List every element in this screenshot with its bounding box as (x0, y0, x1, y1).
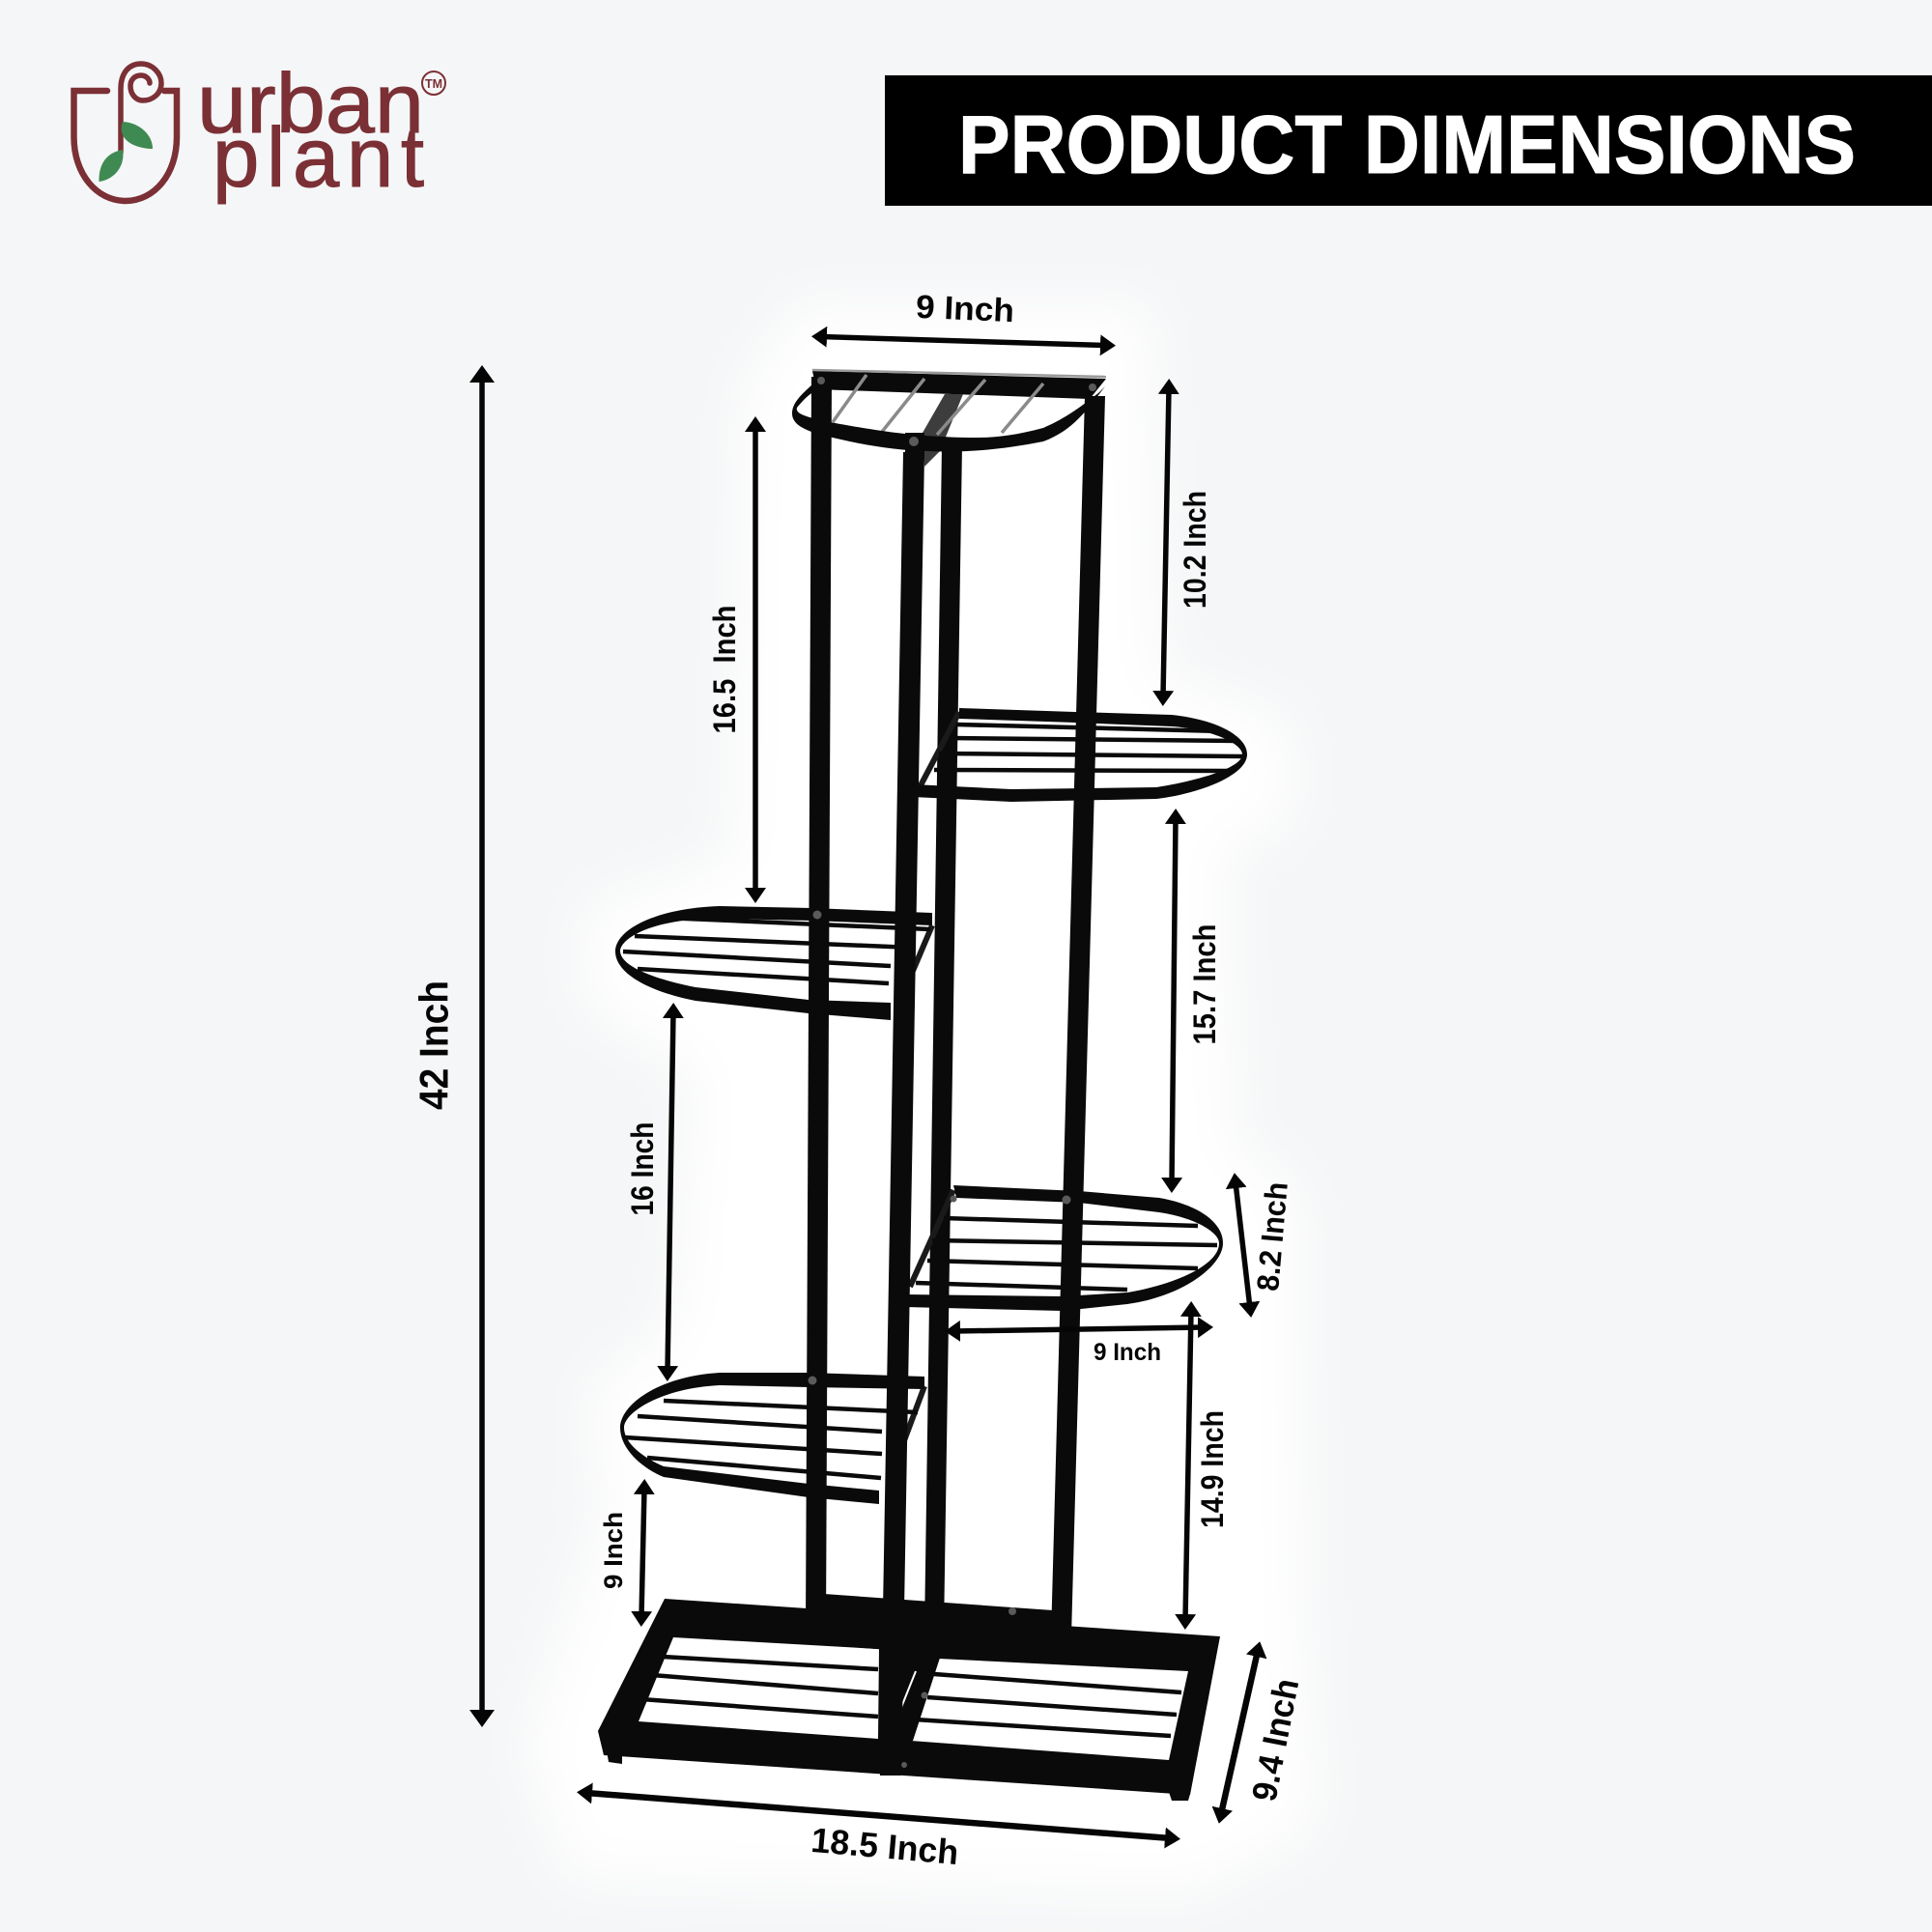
dimension: 9 Inch shelf width (954, 1327, 1204, 1366)
dimension: 9 Inch ground clearance (599, 1489, 644, 1617)
front pole (880, 452, 924, 1776)
dimension: top width 9 Inch (821, 289, 1106, 346)
dimension: base depth 9.4 Inch: 9.4 Inch (1244, 1675, 1306, 1804)
base frame (598, 1594, 1220, 1801)
base right opening (911, 1659, 1188, 1760)
dimension: 9 Inch ground clearance: 9 Inch (599, 1512, 628, 1589)
title banner: product dimensions (885, 75, 1932, 206)
trademark symbol: TM (425, 77, 442, 91)
dimension: 10.2 Inch: 10.2 Inch (1178, 491, 1212, 609)
dimension: 9 Inch shelf width: 9 Inch (1094, 1339, 1161, 1366)
stand poles (806, 377, 1105, 1637)
dimension: 16 Inch (625, 1012, 673, 1372)
dimension: 16 Inch: 16 Inch (625, 1122, 660, 1215)
base rods (641, 1632, 1188, 1736)
wordmark: plant: plant (213, 111, 424, 205)
dimension: 15.7 Inch: 15.7 Inch (1187, 923, 1222, 1045)
plant stand product (598, 370, 1247, 1801)
dimension: base width 18.5 Inch: 18.5 Inch (810, 1820, 960, 1872)
trademark symbol (422, 71, 445, 95)
shelf: upper left (615, 906, 932, 1020)
logo: Urban Plant (73, 57, 445, 205)
dimension: 16.5 Inch: 16.5 Inch (707, 605, 742, 734)
wordmark: urban: urban (197, 57, 424, 151)
dimension: 14.9 Inch: 14.9 Inch (1195, 1410, 1230, 1528)
title banner: product dimensions: PRODUCT DIMENSIONS (958, 99, 1856, 191)
dimension: top width 9 Inch: 9 Inch (915, 289, 1015, 329)
dimension: base width 18.5 Inch (586, 1793, 1171, 1872)
dimension: 15.7 Inch (1172, 818, 1222, 1183)
shelf: upper right (913, 708, 1247, 802)
icon: pot with sprout (73, 64, 177, 201)
base left opening (639, 1637, 879, 1739)
dimension: 14.9 Inch (1185, 1311, 1230, 1620)
dimension: base depth 9.4 Inch (1221, 1651, 1306, 1814)
base centre bracket (898, 1642, 942, 1741)
dimension: total height 42 Inch: 42 Inch (412, 980, 456, 1110)
shelf: lower right (905, 1185, 1223, 1311)
shelf: lower left (620, 1373, 924, 1504)
dimension: 8.2 Inch shelf depth (1236, 1180, 1294, 1308)
dimension: 8.2 Inch shelf depth: 8.2 Inch (1250, 1180, 1294, 1293)
dimension: 10.2 Inch (1163, 388, 1212, 696)
top shelf (792, 370, 1106, 467)
